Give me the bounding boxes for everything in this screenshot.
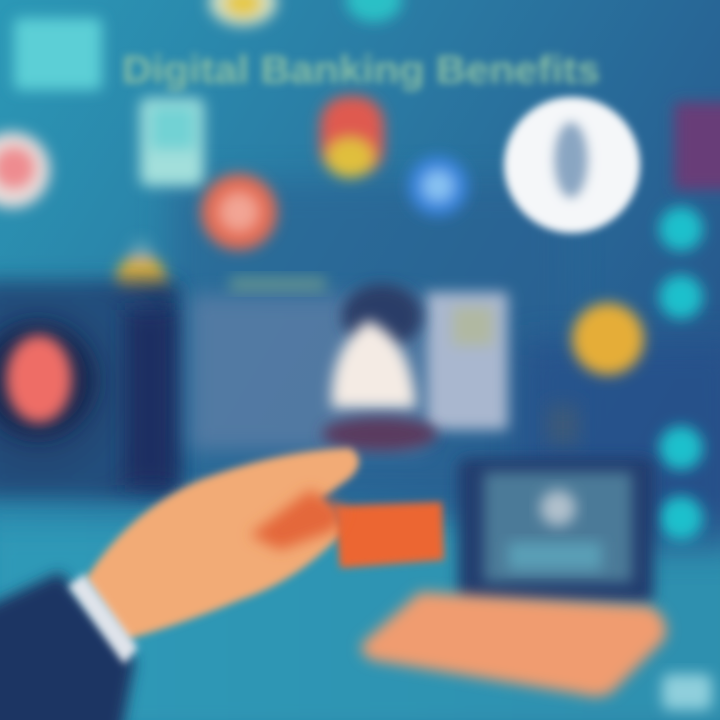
panel: document sheet: [426, 292, 508, 430]
illustration: laptop keyboard: [361, 592, 666, 697]
dot 2: [659, 275, 703, 319]
icon: white microphone circle: [504, 97, 640, 233]
title: Digital Banking Benefits: [122, 49, 600, 92]
dot 3: [659, 426, 703, 470]
illustration: laptop screen: [458, 458, 654, 604]
icon: top teal dot: [346, 0, 402, 22]
icon: bottom-right pale badge: [662, 674, 712, 710]
illustration: sleeve: [0, 572, 135, 720]
illustration: hand: [68, 448, 359, 664]
icon: left pink circle: [0, 132, 50, 208]
panel: dark safe with red circle: [0, 280, 180, 498]
icon: blue star circle: [408, 156, 468, 216]
icon: top yellow coin: [209, 0, 277, 26]
illustration: person: [322, 284, 438, 451]
connector: brown marks: [548, 405, 578, 445]
label: screen heading: [230, 276, 326, 292]
icon: red and yellow badge: [320, 96, 384, 178]
icon: small yellow coin: [116, 240, 166, 305]
dot 4: [659, 496, 703, 540]
icon: orange circle: [201, 174, 277, 250]
icon: phone card: [140, 98, 204, 186]
panel: grey grid screen: [190, 295, 425, 450]
icon: purple panel: [674, 102, 720, 190]
icon: orange credit card: [250, 490, 444, 568]
icon: top-left teal card: [14, 18, 102, 90]
dot 1: [659, 207, 703, 251]
list: teal dots right: [659, 207, 703, 540]
shirt cuff: [68, 574, 138, 664]
icon: gold coin right: [572, 303, 644, 375]
